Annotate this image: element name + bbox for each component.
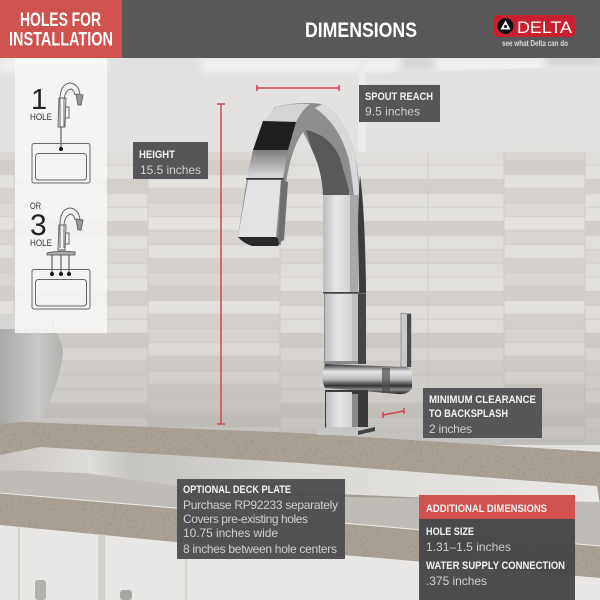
label: or 3 hole: [30, 201, 52, 249]
base column: [325, 390, 368, 429]
heading: holes for installation: [0, 0, 122, 58]
callout: optional deck plate: 10.75 inches wide: [183, 526, 278, 540]
callout: minimum clearance to backsplash: TO BACKSPLASH: [429, 408, 508, 420]
callout: height: [133, 142, 208, 179]
panel: additional dimensions: 1.31–1.5 inches: [426, 540, 511, 554]
icon: one hole faucet and sink: [32, 83, 90, 183]
callout: optional deck plate: [177, 479, 345, 559]
heading: dimensions: DIMENSIONS: [305, 19, 417, 42]
label: or 3 hole: OR: [30, 201, 41, 212]
panel: additional dimensions: HOLE SIZE: [426, 526, 474, 538]
label: 1 hole: HOLE: [30, 112, 52, 123]
spout arc: [238, 103, 366, 292]
callout: minimum clearance to backsplash: MINIMUM CLEARANCE: [429, 394, 536, 406]
label: or 3 hole: HOLE: [30, 238, 52, 249]
panel: additional dimensions: [419, 495, 575, 600]
panel: additional dimensions: .375 inches: [426, 574, 487, 588]
label: 1 hole: 1: [31, 84, 47, 116]
callout: optional deck plate: Purchase RP92233 separately: [183, 498, 338, 512]
arrow: backsplash clearance dimension line: [383, 408, 404, 418]
callout: spout reach: 9.5 inches: [365, 104, 420, 118]
logo: delta: see what Delta can do: [502, 39, 568, 48]
arrow: spout reach dimension line: [257, 85, 339, 91]
label: 1 hole: [30, 84, 52, 123]
callout: optional deck plate: Covers pre-existing holes: [183, 512, 308, 526]
heading: holes for installation: INSTALLATION: [9, 30, 113, 50]
callout: spout reach: [359, 85, 440, 122]
logo: delta: DELTA: [517, 18, 573, 37]
arrow: height dimension line: [217, 104, 225, 424]
panel: holes for installation: [15, 58, 107, 333]
handle body: [322, 364, 412, 394]
callout: height: 15.5 inches: [140, 163, 201, 177]
callout: optional deck plate: 8 inches between hole centers: [183, 542, 337, 556]
faucet: [238, 103, 412, 435]
deck: [317, 427, 375, 435]
callout: minimum clearance to backsplash: [423, 388, 542, 438]
panel: additional dimensions: ADDITIONAL DIMENSIONS: [426, 503, 547, 515]
callout: spout reach: SPOUT REACH: [365, 91, 433, 103]
header bar: [0, 0, 600, 58]
callout: optional deck plate: OPTIONAL DECK PLATE: [183, 484, 291, 496]
label: or 3 hole: 3: [30, 209, 47, 242]
icon: three hole faucet, deck plate and sink: [32, 208, 90, 309]
panel: additional dimensions: WATER SUPPLY CONNECTION: [426, 560, 565, 572]
column: [324, 293, 366, 364]
heading: holes for installation: HOLES FOR: [20, 10, 101, 31]
lever: [401, 313, 411, 367]
callout: height: HEIGHT: [139, 149, 175, 161]
logo: delta: [494, 15, 575, 48]
mixing bowl: [0, 315, 63, 424]
callout: minimum clearance to backsplash: 2 inches: [429, 422, 472, 436]
